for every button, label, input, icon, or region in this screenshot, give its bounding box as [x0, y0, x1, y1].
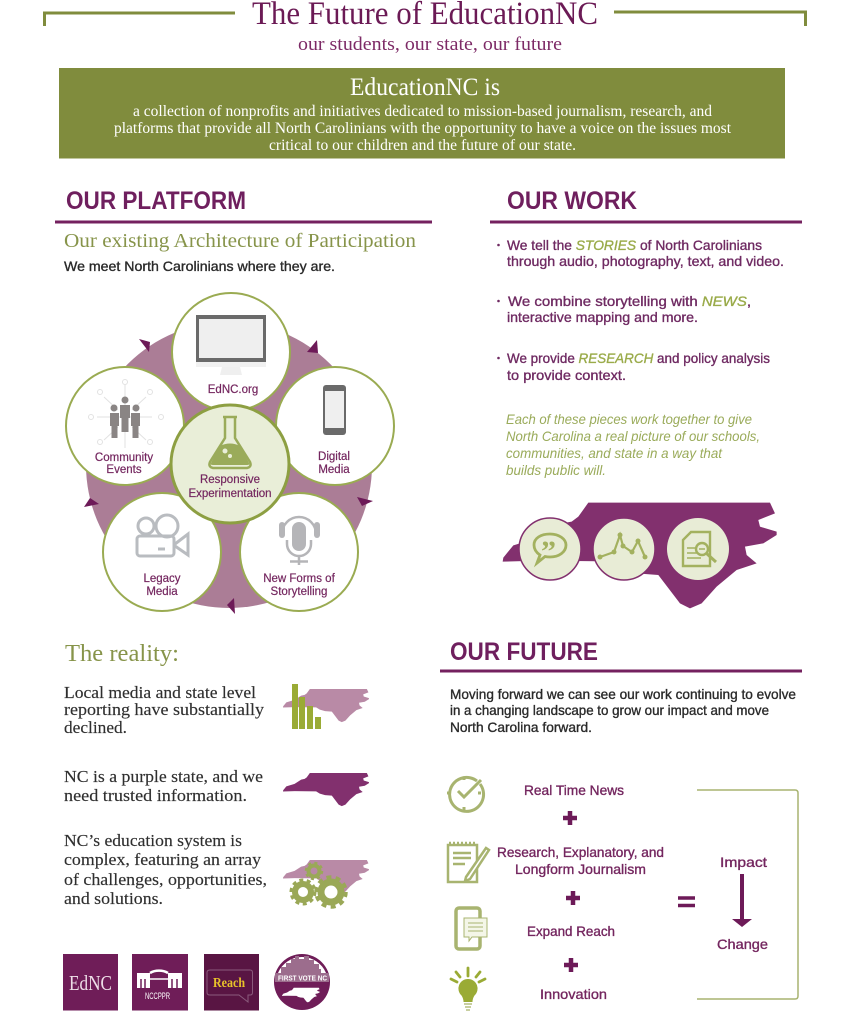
icon: gears over map — [283, 860, 369, 907]
arrow: impact to change — [732, 874, 752, 927]
logo: First Vote NC — [274, 954, 330, 1010]
text: change: Change — [717, 936, 768, 952]
text: innovation: Innovation — [540, 986, 607, 1002]
text: purple state: need trusted information. — [64, 786, 247, 805]
text: italic summary: North Carolina a real picture of our schools, — [506, 428, 760, 444]
node: Digital Media: Digital — [318, 451, 350, 463]
text: education system: and solutions. — [64, 889, 163, 908]
text: research — [497, 844, 664, 877]
text: local media — [64, 683, 265, 737]
subheading: the reality: The reality: — [65, 641, 179, 667]
title bracket right — [614, 12, 806, 26]
text: our work bullets: through audio, photography, text, and video. — [507, 253, 784, 269]
text: expand reach: Expand Reach — [527, 923, 615, 939]
text: moving forward: North Carolina forward. — [450, 719, 592, 735]
subtitle: our students, our state, our future — [298, 34, 562, 55]
text: italic summary: builds public will. — [506, 462, 606, 478]
text: education system: of challenges, opportunities, — [64, 870, 267, 889]
text: impact: Impact — [720, 854, 767, 870]
arrows on the ring — [84, 339, 373, 614]
heading: our work: OUR WORK — [507, 187, 637, 215]
logo: EdNC — [63, 954, 118, 1010]
node: Legacy Media: Legacy — [143, 573, 181, 585]
bracket — [697, 790, 798, 999]
text: italic summary: Each of these pieces work together to give — [506, 411, 752, 427]
panel: EducationNC is banner — [59, 68, 785, 158]
text: education system: complex, featuring an array — [64, 850, 262, 869]
text: moving forward: in a changing landscape to grow our impact and move — [450, 702, 769, 718]
icon: phone — [323, 385, 346, 435]
plus sign 2 — [566, 891, 580, 905]
text: research: Research, Explanatory, and — [497, 844, 664, 860]
text: local media: Local media and state level — [64, 683, 256, 702]
text: moving forward: Moving forward we can see our work continuing to evolve — [450, 686, 796, 702]
icon: clock check — [447, 777, 484, 811]
panel: EducationNC is banner: critical to our children and the future of our state. — [269, 137, 576, 154]
node: Community Events — [66, 367, 184, 485]
icon: flask — [209, 417, 251, 468]
node: Digital Media — [276, 367, 394, 485]
text: our work bullets: We combine storytelling with NEWS, — [508, 293, 751, 309]
icon: speech quote: ” — [541, 535, 556, 568]
icon: line chart — [593, 518, 655, 580]
node: Digital Media: Media — [318, 464, 350, 476]
node: Community Events: Community — [95, 452, 153, 464]
title bracket left — [44, 13, 235, 26]
icon: speech quote — [519, 518, 581, 580]
diagram: platform cycle — [66, 293, 394, 614]
text: italic summary: communities, and state in a way that — [506, 445, 723, 461]
icon: microphone — [279, 517, 320, 565]
text: local media: reporting have substantially — [64, 700, 265, 719]
text: education system: NC’s education system is — [64, 831, 242, 850]
node: Responsive Experimentation: Experimentation — [188, 488, 272, 500]
logo: First Vote NC: FIRST VOTE NC — [278, 976, 327, 982]
plus sign 1 — [563, 811, 577, 825]
map: North Carolina with icons — [503, 503, 777, 608]
text: purple state — [64, 767, 263, 805]
text: research: Longform Journalism — [515, 861, 646, 877]
text: our work bullets: interactive mapping and more. — [507, 309, 698, 325]
equals sign — [678, 898, 695, 906]
header — [44, 0, 806, 55]
text: italic summary — [506, 411, 760, 478]
text: real time news: Real Time News — [524, 782, 624, 798]
ring disc — [86, 322, 372, 608]
text: our work bullets: We provide RESEARCH and policy analysis — [507, 350, 770, 366]
icon: declining bars over map — [283, 684, 369, 729]
icon: purple map — [283, 773, 369, 806]
node: Legacy Media: Media — [146, 586, 178, 598]
icon: lightbulb — [451, 968, 485, 1010]
panel: EducationNC is banner: EducationNC is — [350, 74, 500, 101]
logo: Reach — [204, 954, 259, 1010]
node: Legacy Media — [103, 493, 221, 611]
text: our work bullets: We tell the STORIES of North Carolinians — [507, 237, 762, 253]
text: education system — [64, 831, 267, 908]
node: New Forms of Storytelling — [240, 493, 358, 611]
text: moving forward — [450, 686, 796, 735]
text: purple state: NC is a purple state, and we — [64, 767, 263, 786]
text: our work bullets: to provide context. — [507, 367, 626, 383]
logo: NCCPPR: NCCPPR — [145, 991, 170, 1001]
icon: video camera — [137, 515, 188, 556]
subheading: architecture of participation: Our existing Architecture of Participation — [64, 230, 416, 252]
icon: phone with message — [456, 908, 487, 949]
text: we meet north carolinians: We meet North Carolinians where they are. — [64, 258, 335, 274]
logo: EdNC: EdNC — [69, 971, 112, 995]
panel: EducationNC is banner: a collection of nonprofits and initiatives dedicated to mission-based journalism, research, and — [133, 103, 712, 120]
icon: document with magnifier — [667, 518, 729, 580]
node: EdNC.org — [172, 293, 290, 411]
logo: Reach: Reach — [213, 976, 245, 991]
plus sign 3 — [564, 958, 578, 972]
node: Responsive Experimentation — [171, 405, 289, 523]
logo: NCCPPR — [132, 954, 188, 1010]
heading: our future: OUR FUTURE — [450, 638, 598, 666]
icon: notepad and pencil — [448, 843, 489, 882]
node: New Forms of Storytelling: New Forms of — [263, 573, 336, 585]
text: local media: declined. — [64, 718, 127, 737]
node: Community Events: Events — [106, 464, 142, 476]
node: Responsive Experimentation: Responsive — [200, 474, 260, 486]
icon: people network — [88, 380, 164, 448]
panel: EducationNC is banner: platforms that provide all North Carolinians with the opportunity to have a voice on the issues most — [114, 120, 732, 137]
node: New Forms of Storytelling: Storytelling — [271, 586, 327, 598]
text: our work bullets — [497, 237, 784, 383]
icon: monitor — [196, 315, 266, 375]
heading: our platform: OUR PLATFORM — [66, 187, 246, 215]
node: EdNC.org: EdNC.org — [208, 384, 258, 396]
